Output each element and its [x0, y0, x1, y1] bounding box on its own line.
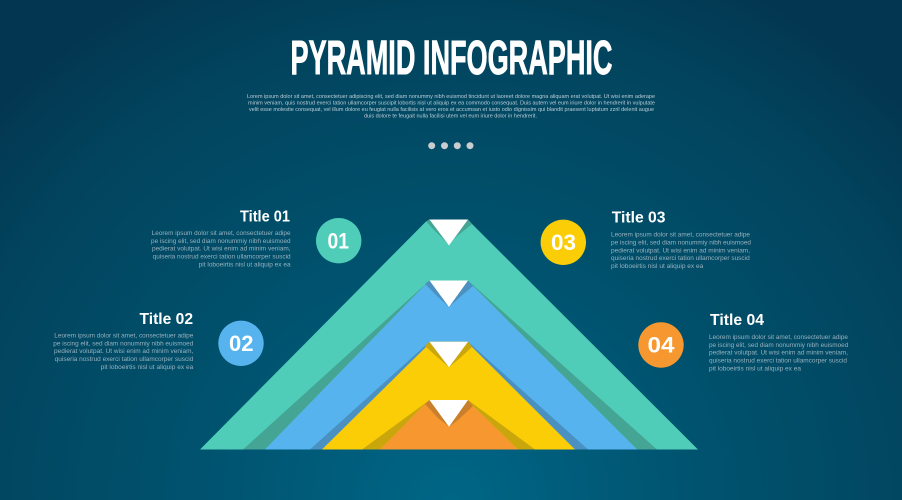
panel: item 04 [638, 312, 849, 373]
panel: item 01 [151, 209, 361, 268]
text block: item 03: pe iscing elit, sed diam nonummiy nibh euismoed [611, 239, 751, 246]
heading: Title 04: Title 04 [710, 312, 764, 329]
text block: item 01: pe iscing elit, sed diam nonummiy nibh euismoed [151, 238, 291, 245]
text block: item 01: Leorem ipsum dolor sit amet, consectetuer adipe [152, 230, 291, 237]
badge: 01 [316, 218, 361, 263]
text block: item 01 [151, 230, 291, 268]
heading: Title 03: Title 03 [612, 210, 666, 227]
text block: item 02: pit loboeirtis nisl ut aliquip ex ea [101, 364, 194, 371]
notch marker 4 [430, 400, 468, 427]
pagination dots [428, 142, 474, 149]
panel: item 03 [541, 210, 751, 270]
text block: item 02: quiseria nostrud exerci tation ullamcorper suscid [55, 356, 194, 363]
text block: item 04: pit loboeirtis nisl ut aliquip ex ea [709, 366, 801, 373]
badge: 02 [218, 321, 264, 366]
intro text block: Lorem ipsum dolor sit amet, consectetuer adipiscing elit, sed diam nonummy nibh euismod tincidunt ut laoreet dolore magna aliquam erat volutpat. Ut wisi enim aderape [247, 94, 655, 100]
heading: Title 02: Title 02 [140, 311, 193, 328]
panel: item 02 [53, 311, 264, 371]
pyramid chart [200, 220, 698, 450]
text block: item 04: pe iscing elit, sed diam nonummiy nibh euismoed [709, 342, 849, 349]
text block: item 04: Leorem ipsum dolor sit amet, consectetuer adipe [709, 334, 849, 341]
text block: item 04 [709, 334, 849, 373]
text block: item 02 [53, 332, 194, 371]
intro text block: minim veniam, quis nostrud exerci tation ullamcorper suscipit lobortis nisl ut aliquip ex ea commodo consequat. Duis autem vel eum iriure dolor in hendrerit in vulputate [248, 100, 655, 106]
text block: item 03 [611, 231, 751, 270]
pyramid layer 3: yellow [322, 342, 575, 450]
notch marker 2 [430, 280, 468, 307]
heading: Title 01: Title 01 [240, 209, 290, 226]
badge: 03: 03 [551, 230, 576, 255]
text block: item 02: Leorem ipsum dolor sit amet, consectetuer adipe [54, 332, 194, 339]
text block: item 03: Leorem ipsum dolor sit amet, consectetuer adipe [611, 231, 751, 238]
text block: item 03: quiseria nostrud exerci tation ullamcorper suscid [611, 255, 750, 262]
text block: item 03: pit loboeirtis nisl ut aliquip ex ea [611, 263, 704, 270]
badge: 02: 02 [229, 331, 254, 356]
badge: 04: 04 [648, 333, 675, 358]
badge: 04 [638, 322, 684, 368]
intro text block [247, 94, 655, 120]
text block: item 04: quiseria nostrud exerci tation ullamcorper suscid [709, 357, 848, 364]
notch marker 1 [430, 220, 468, 246]
text block: item 01: pit loboeirtis nisl ut aliquip ex ea [199, 261, 291, 268]
pyramid layer 4: orange [380, 400, 518, 450]
text block: item 01: pedierat volutpat. Ut wisi enim ad minim veniam, [152, 246, 291, 253]
text block: item 01: quiseria nostrud exerci tation ullamcorper suscid [153, 253, 291, 260]
notch marker 3 [430, 342, 468, 367]
text block: item 02: pedierat volutpat. Ut wisi enim ad minim veniam, [54, 348, 194, 355]
text block: item 04: pedierat volutpat. Ut wisi enim ad minim veniam, [709, 350, 848, 357]
pyramid layer 2: blue [265, 280, 637, 450]
badge: 01: 01 [328, 228, 349, 253]
badge: 03 [541, 220, 586, 265]
text block: item 03: pedierat volutpat. Ut wisi enim ad minim veniam, [611, 247, 750, 254]
text block: item 02: pe iscing elit, sed diam nonummiy nibh euismoed [53, 340, 194, 347]
pyramid layer 1: teal [200, 220, 698, 450]
title: PYRAMID INFOGRAPHIC [290, 32, 612, 85]
intro text block: velit esse molestie consequat, vel illum dolore eu feugiat nulla facilisis at vero eros et accumsan et iusto odio dignissim qui blandit praesent luptatum zzril delenit augue [249, 107, 654, 113]
intro text block: duis dolore te feugait nulla facilisi utem vel eum iriure dolor in hendrerit. [364, 114, 537, 120]
